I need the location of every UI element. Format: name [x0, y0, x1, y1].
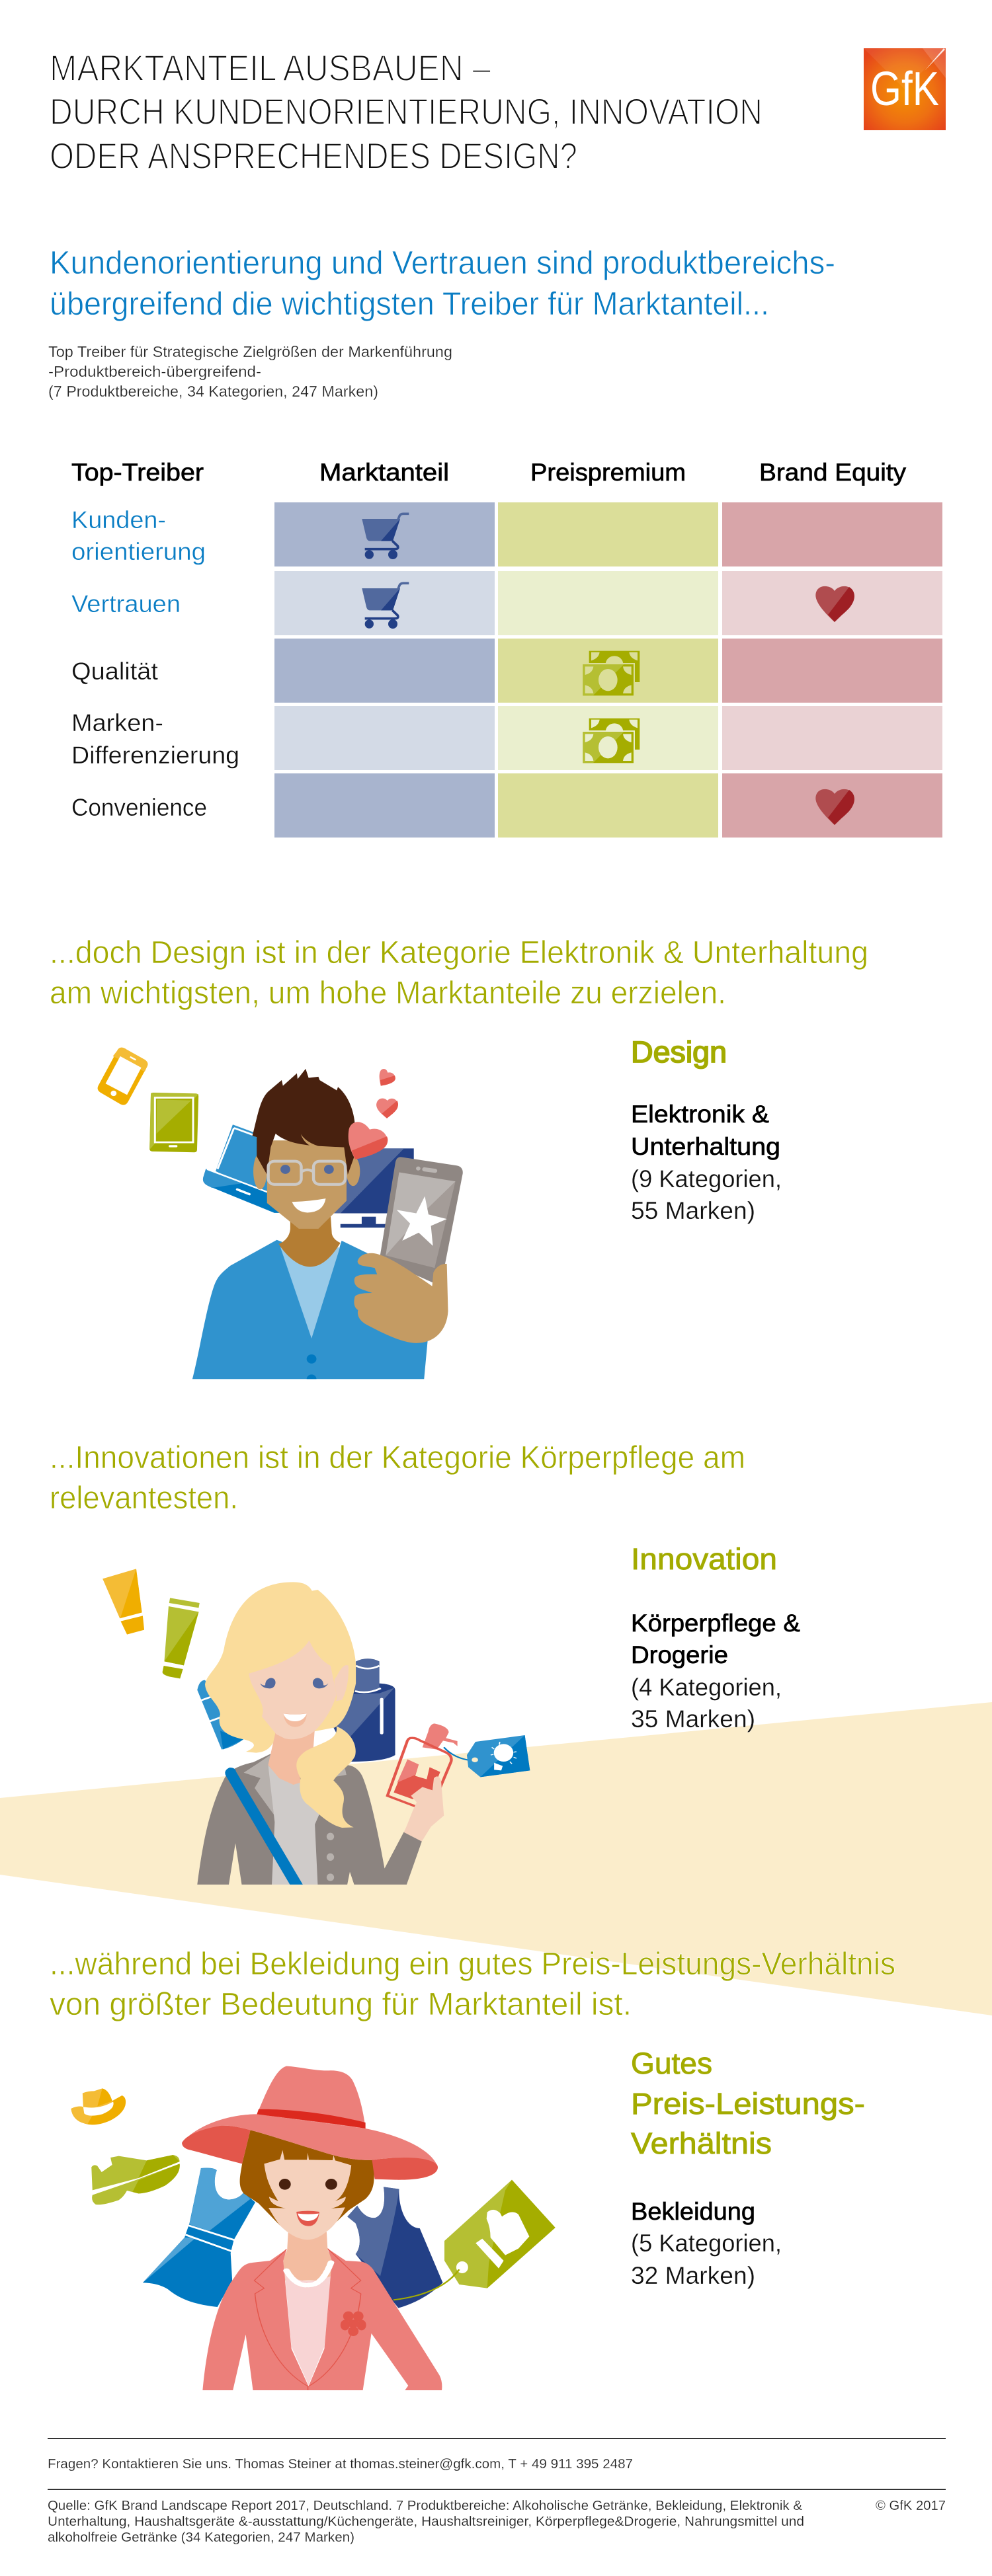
copyright: © GfK 2017 — [876, 2499, 946, 2513]
icon: smartphone with star — [380, 1157, 463, 1286]
subtitle text block: Top Treiber für Strategische Zielgrößen der Markenführung — [48, 343, 452, 360]
row labels: Convenience — [71, 794, 207, 821]
icon: shopping cart, Vertrauen — [362, 583, 409, 629]
icon: blue dress — [143, 2168, 255, 2307]
title: DURCH KUNDENORIENTIERUNG, INNOVATION — [50, 91, 763, 132]
icon: blue laptop — [203, 1124, 279, 1213]
heading: innovation section: relevantesten. — [50, 1481, 238, 1516]
text block: design category — [631, 1035, 782, 1224]
icon: green tube — [163, 1598, 200, 1678]
source note: Unterhaltung, Haushaltsgeräte &-ausstattung/Küchengeräte, Haushaltsreiniger, Körperpflege&Drogerie, Nahrungsmittel und — [48, 2515, 804, 2529]
heading: clothing section: ...während bei Bekleidung ein gutes Preis-Leistungs-Verhältnis — [50, 1947, 895, 1982]
subtitle text block: (7 Produktbereiche, 34 Kategorien, 247 Marken) — [48, 383, 378, 400]
icon: green shoe — [91, 2155, 180, 2205]
text block: innovation category: Körperpflege & — [631, 1610, 800, 1637]
figure: hat — [182, 2066, 438, 2180]
divider rule: contact — [48, 2438, 946, 2439]
row labels — [71, 506, 239, 821]
row labels: orientierung — [71, 538, 206, 565]
heading: design section: am wichtigsten, um hohe Marktanteile zu erzielen. — [50, 976, 726, 1011]
text block: design category: Unterhaltung — [631, 1133, 780, 1160]
text block: clothing category: 32 Marken) — [631, 2262, 755, 2289]
figure: jacket and shirt — [197, 1754, 422, 1885]
text block: design category: 55 Marken) — [631, 1197, 755, 1224]
title: ODER ANSPRECHENDES DESIGN? — [50, 135, 577, 176]
icon: yellow phone — [98, 1048, 147, 1105]
figure: hand — [404, 1776, 444, 1842]
subtitle text block: -Produktbereich-übergreifend- — [48, 363, 261, 380]
icon: yellow tube — [103, 1569, 144, 1635]
figure: jacket — [202, 2232, 442, 2390]
heading: innovation section — [50, 1440, 745, 1516]
illustration: blonde woman with cosmetics — [103, 1569, 530, 1885]
illustration: man with phone and devices — [98, 1048, 463, 1379]
table header row: Top-Treiber — [71, 459, 204, 486]
row labels: Qualität — [71, 658, 159, 685]
source note: alkoholfreie Getränke (34 Kategorien, 247 Marken) — [48, 2530, 354, 2545]
text block: innovation category: (4 Kategorien, — [631, 1674, 782, 1701]
heading: clothing section — [50, 1947, 895, 2022]
contact line: Fragen? Kontaktieren Sie uns. Thomas Steiner at thomas.steiner@gfk.com, T + 49 911 395 2487 — [48, 2457, 633, 2472]
table cells — [274, 502, 942, 838]
subtitle text block — [48, 343, 452, 400]
row labels: Kunden- — [71, 506, 166, 533]
figure: neck and face — [249, 1641, 349, 1785]
source note: Quelle: GfK Brand Landscape Report 2017, Deutschland. 7 Produktbereiche: Alkoholische Getränke, Bekleidung, Elektronik & — [48, 2499, 803, 2513]
source note — [48, 2499, 804, 2545]
icon: monitor — [331, 1148, 414, 1259]
table header row — [71, 459, 907, 486]
heading: innovation section: ...Innovationen ist in der Kategorie Körperpflege am — [50, 1440, 745, 1475]
icon: small yellow hat — [71, 2088, 126, 2125]
icon: flower brooch — [341, 2312, 366, 2336]
heading: clothing section: von größter Bedeutung für Marktanteil ist. — [50, 1987, 632, 2022]
row labels: Differenzierung — [71, 742, 239, 769]
icon: hearts — [349, 1069, 398, 1159]
icon: blue tube — [197, 1680, 245, 1750]
icon: heart, Convenience — [815, 789, 854, 825]
text block: design category: Design — [631, 1035, 727, 1069]
table header row: Marktanteil — [319, 459, 449, 486]
figure: torso — [192, 1216, 429, 1379]
logo: GfK — [864, 48, 946, 130]
text block: clothing category: Preis-Leistungs- — [631, 2087, 865, 2121]
title — [50, 47, 763, 176]
text block: design category: (9 Kategorien, — [631, 1165, 782, 1192]
icon: pump bottle in hand — [388, 1723, 458, 1807]
icon: shopping cart, Kundenorientierung — [362, 514, 409, 559]
panel: driver table — [71, 459, 942, 838]
row labels: Marken- — [71, 709, 163, 736]
text block: innovation category: Drogerie — [631, 1641, 728, 1668]
icon: green tablet — [149, 1093, 198, 1152]
background: cream diagonal band — [0, 1702, 992, 2015]
table header row: Preispremium — [530, 459, 686, 486]
figure: head — [253, 1069, 360, 1229]
icon: heart, Vertrauen — [815, 586, 854, 622]
text block: clothing category: (5 Kategorien, — [631, 2230, 782, 2257]
icon: blue price tag with light bulb — [444, 1735, 530, 1777]
divider rule: source — [48, 2489, 946, 2490]
text block: innovation category — [631, 1542, 800, 1733]
heading: blue intro: Kundenorientierung und Vertrauen sind produktbereichs- — [50, 245, 835, 281]
figure: hair and face — [240, 2130, 374, 2240]
figure: hair back — [205, 1582, 356, 1753]
heading: blue intro: übergreifend die wichtigsten Treiber für Marktanteil... — [50, 286, 769, 322]
heading: design section: ...doch Design ist in der Kategorie Elektronik & Unterhaltung — [50, 935, 868, 970]
icon: navy bottle — [333, 1659, 395, 1762]
icon: green price tag with thumb up — [393, 2180, 556, 2300]
text block: clothing category — [631, 2047, 865, 2289]
heading: blue intro — [50, 245, 835, 322]
row labels: Vertrauen — [71, 590, 181, 617]
icon: navy top — [347, 2187, 443, 2308]
text block: clothing category: Gutes — [631, 2047, 712, 2080]
figure: hair lock — [296, 1727, 356, 1828]
heading: design section — [50, 935, 868, 1011]
figure: hand — [354, 1253, 448, 1343]
table header row: Brand Equity — [759, 459, 907, 486]
text block: design category: Elektronik & — [631, 1101, 769, 1128]
illustration: woman with hat and clothes — [71, 2066, 556, 2390]
text block: innovation category: 35 Marken) — [631, 1705, 755, 1733]
icon: banknotes, Qualität — [581, 651, 640, 697]
title: MARKTANTEIL AUSBAUEN – — [50, 47, 491, 89]
text block: clothing category: Bekleidung — [631, 2198, 755, 2225]
text block: innovation category: Innovation — [631, 1542, 777, 1576]
text block: clothing category: Verhältnis — [631, 2127, 772, 2160]
icon: banknotes, Marken-Differenzierung — [581, 719, 640, 764]
logo: GfK: GfK — [870, 63, 939, 116]
